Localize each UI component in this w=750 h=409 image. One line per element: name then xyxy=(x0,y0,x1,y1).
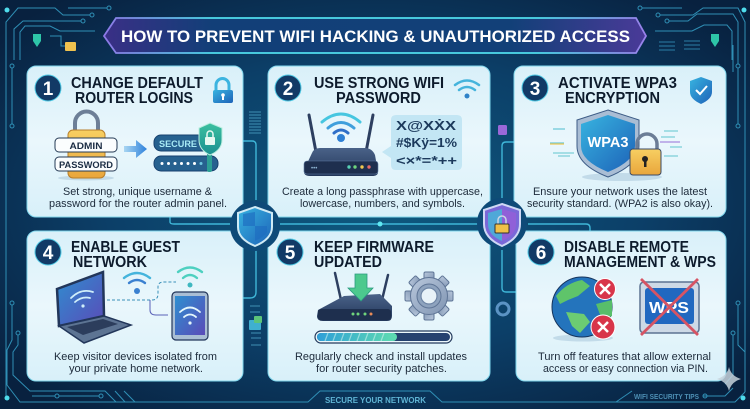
body text 6: access or easy connection via PIN. xyxy=(543,363,708,375)
icon: tablet xyxy=(172,292,208,340)
panel 6: disable remote xyxy=(516,231,726,381)
heading 5: KEEP FIRMWARE xyxy=(314,239,434,256)
number badge 2 xyxy=(275,75,301,101)
icon: wifi teal xyxy=(178,268,202,288)
password speech bubble: <×*=*++ xyxy=(396,153,458,168)
connector lines xyxy=(170,112,590,345)
body text 6: Turn off features that allow external xyxy=(538,351,711,363)
icon: wpa3 shield and padlock xyxy=(550,110,682,181)
number badge 2: 2 xyxy=(283,79,293,100)
footer label left: SECURE YOUR NETWORK xyxy=(325,395,427,405)
heading 6: DISABLE REMOTE xyxy=(564,239,689,256)
arrow xyxy=(124,140,147,158)
icon: padlock with credentials: ADMIN xyxy=(70,141,103,152)
sparkle icon xyxy=(717,367,741,391)
body text 4: your private home network. xyxy=(69,363,203,375)
heading 2: PASSWORD xyxy=(336,90,421,107)
icon: router with wifi xyxy=(304,114,378,176)
body text 1: password for the router admin panel. xyxy=(49,198,227,210)
shield hub left xyxy=(230,201,280,251)
number badge 6 xyxy=(528,239,554,265)
icon: secure fields and key shield xyxy=(154,123,222,172)
icon: crossed out wps: WPS xyxy=(649,300,689,317)
body text 4: Keep visitor devices isolated from xyxy=(54,351,217,363)
footer label right: WIFI SECURITY TIPS xyxy=(634,392,699,401)
number badge 1 xyxy=(35,75,61,101)
icon: laptop xyxy=(57,272,131,343)
password speech bubble xyxy=(382,115,462,170)
body text 3: security standard. (WPA2 is also okay). xyxy=(527,198,713,210)
number badge 5: 5 xyxy=(285,243,296,264)
icon: small padlock xyxy=(213,78,233,103)
body text 5: for router security patches. xyxy=(316,363,447,375)
body text 1: Set strong, unique username & xyxy=(63,186,213,198)
heading 4: NETWORK xyxy=(73,254,148,271)
heading 2: USE STRONG WIFI xyxy=(314,75,444,92)
shield hub right xyxy=(477,198,527,248)
body text 2: Create a long passphrase with uppercase, xyxy=(282,186,483,198)
icon: secure fields and key shield: SECURE xyxy=(159,139,197,149)
number badge 1: 1 xyxy=(43,79,54,100)
body text 2: lowercase, numbers, and symbols. xyxy=(300,198,465,210)
panel 1: change default router logins xyxy=(27,66,243,217)
circuit decoration top left xyxy=(4,6,111,400)
number badge 5 xyxy=(277,239,303,265)
heading 3: ENCRYPTION xyxy=(565,90,660,107)
icon: padlock with credentials xyxy=(55,112,117,180)
title text: HOW TO PREVENT WIFI HACKING & UNAUTHORIZED ACCESS xyxy=(121,27,630,46)
icon: wpa3 shield and padlock: WPA3 xyxy=(588,134,628,151)
number badge 6: 6 xyxy=(536,243,546,264)
panel 5: firmware xyxy=(268,231,490,381)
icon: small check shield xyxy=(690,77,712,104)
number badge 3: 3 xyxy=(530,79,540,100)
icon: globe with x marks xyxy=(552,277,616,342)
password speech bubble: #$Kÿ=1% xyxy=(396,135,457,150)
heading 4: ENABLE GUEST xyxy=(71,239,180,256)
body text 5: Regularly check and install updates xyxy=(295,351,467,363)
heading 6: MANAGEMENT & WPS xyxy=(564,254,716,271)
heading 1: ROUTER LOGINS xyxy=(75,90,193,107)
title banner xyxy=(104,18,646,53)
icon: router with download arrow xyxy=(317,273,392,321)
panel 2: strong wifi password xyxy=(268,66,490,217)
password speech bubble: X@XẊX xyxy=(396,118,456,133)
panel 3: activate wpa3 xyxy=(514,66,726,217)
progress bar xyxy=(315,331,452,343)
icon: padlock with credentials: PASSWORD xyxy=(59,160,113,171)
panel 4: guest network xyxy=(27,231,243,381)
heading 1: CHANGE DEFAULT xyxy=(71,75,203,92)
icon: crossed out wps xyxy=(640,279,699,335)
icon: gear xyxy=(405,272,453,320)
number badge 4: 4 xyxy=(43,243,54,264)
heading 3: ACTIVATE WPA3 xyxy=(558,75,677,92)
circuit decoration bottom xyxy=(4,301,746,402)
number badge 3 xyxy=(522,75,548,101)
heading 5: UPDATED xyxy=(314,254,382,271)
body text 3: Ensure your network uses the latest xyxy=(533,186,707,198)
icon: wifi blue xyxy=(124,273,150,294)
circuit decoration top right xyxy=(638,6,746,392)
icon: small wifi xyxy=(455,80,479,98)
number badge 4 xyxy=(35,239,61,265)
icon: router with wifi: ••• xyxy=(311,166,317,172)
network lines xyxy=(107,282,176,300)
